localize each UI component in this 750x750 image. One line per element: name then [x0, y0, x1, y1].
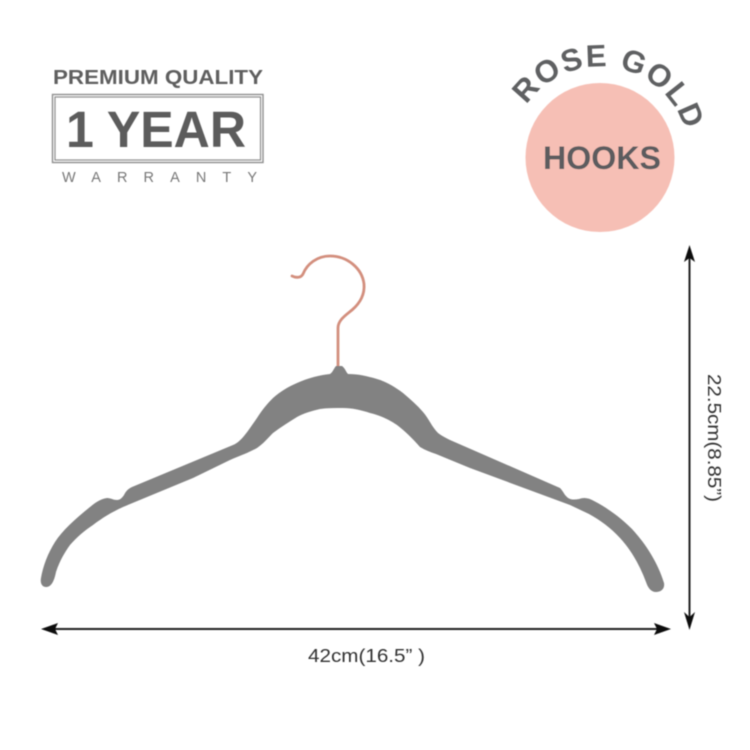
hanger: [41, 256, 664, 592]
badge main text: 1 year: 1 YEAR: [66, 101, 246, 158]
rose gold hooks badge: [511, 44, 702, 232]
curved label: rose gold: ROSE GOLD: [511, 44, 702, 126]
pink circle: [526, 83, 674, 232]
height label: 22.5cm(8.85”): [704, 374, 724, 502]
badge heading: premium quality: PREMIUM QUALITY: [53, 67, 264, 89]
circle label: hooks: HOOKS: [543, 140, 661, 176]
badge subtitle: warranty: WARRANTY: [62, 170, 257, 186]
warranty badge: [52, 67, 264, 186]
width arrow: [41, 623, 671, 635]
rose gold hook: [292, 256, 364, 368]
badge double frame: [52, 94, 263, 162]
width label: 42cm(16.5” ): [308, 646, 425, 666]
height arrow: [684, 245, 695, 630]
flocked grey body: [41, 366, 664, 592]
